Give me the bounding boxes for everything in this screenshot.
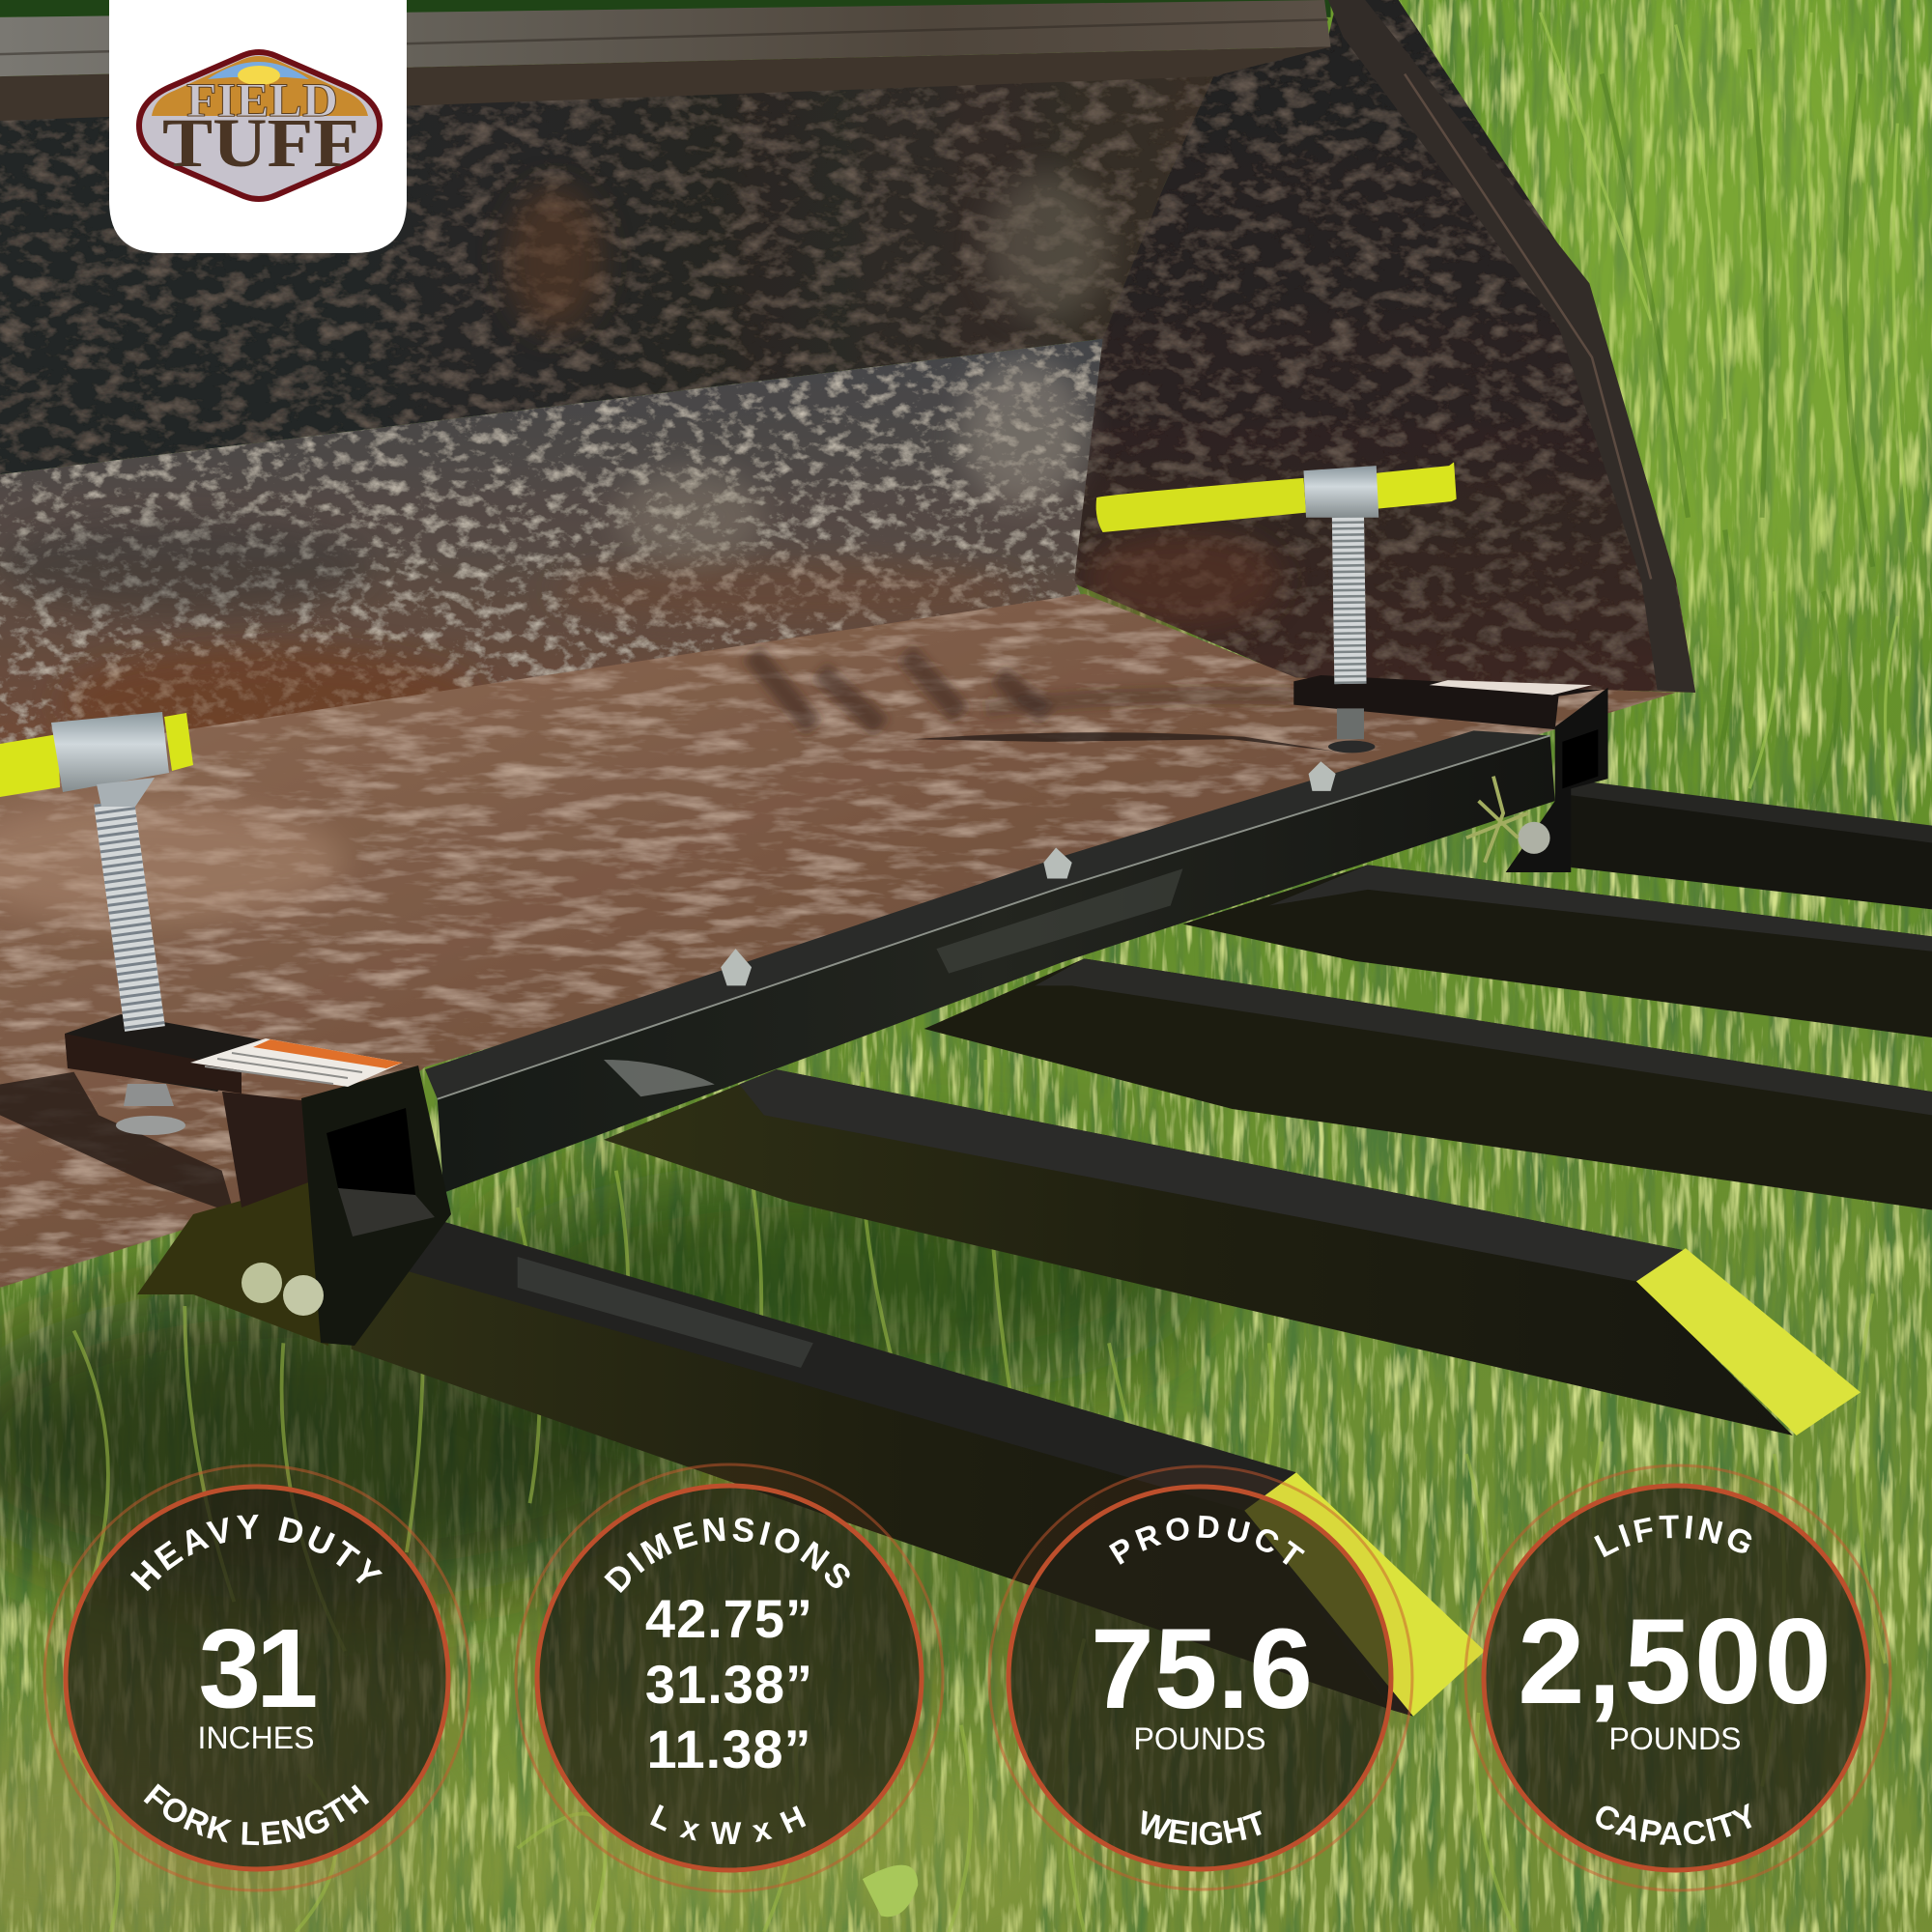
- logo emblem: TUFF: [162, 104, 359, 182]
- stat badge: dimensions: 42.75”: [645, 1588, 813, 1649]
- stat badge: lifting capacity: POUNDS: [1609, 1721, 1741, 1756]
- crossbar: [425, 730, 1555, 1193]
- logo emblem: [137, 48, 383, 199]
- bucket side plate: [1060, 0, 1695, 693]
- stat badge: dimensions: 11.38”: [646, 1719, 812, 1779]
- stat badge: product weight: WEIGHT: [1142, 1810, 1262, 1845]
- bucket floor: [0, 594, 1676, 1288]
- fork tine 3: [924, 958, 1932, 1210]
- fork tine 1 (front) with yellow tip: [332, 1189, 1485, 1717]
- bucket back wall, dark upper: [0, 49, 1306, 474]
- stat badge: dimensions: DIMENSIONS: [604, 1517, 850, 1593]
- bolts on crossbar: [721, 761, 1336, 985]
- stat badge: fork length: INCHES: [198, 1720, 314, 1755]
- stat badge: fork length: 31: [198, 1605, 316, 1731]
- stat badge: lifting capacity: 2,500: [1518, 1595, 1834, 1729]
- bucket back wall, lit rusty lower: [0, 339, 1103, 770]
- T-handle left: [0, 712, 193, 1135]
- stat badge: lifting capacity: CAPACITY: [1596, 1803, 1752, 1845]
- stat badge: product weight: [987, 1464, 1414, 1891]
- logo emblem: FIELD: [186, 72, 338, 127]
- right clamp assembly: [1293, 675, 1608, 872]
- left clamp bracket: [65, 1014, 451, 1346]
- stat badge: product weight: 75.6: [1091, 1605, 1313, 1733]
- stat badge: fork length: HEAVY DUTY: [129, 1515, 383, 1592]
- stat badge: lifting capacity: [1464, 1464, 1891, 1891]
- stat badge: fork length: [43, 1464, 471, 1891]
- stat badge: dimensions: L x W x H: [650, 1804, 806, 1844]
- fork tine 4: [1182, 865, 1932, 1037]
- stat badge: dimensions: 31.38”: [645, 1654, 813, 1715]
- fork tine 5 (rear): [1565, 779, 1932, 909]
- stat badge: fork length: FORK LENGTH: [143, 1783, 369, 1845]
- T-handle right: [1096, 462, 1457, 684]
- stat badge: dimensions: [514, 1463, 945, 1893]
- stat badge: lifting capacity: LIFTING: [1594, 1515, 1752, 1557]
- bucket top strip: [0, 0, 1331, 17]
- stat badge: product weight: POUNDS: [1134, 1721, 1265, 1756]
- stat badge: product weight: PRODUCT: [1109, 1515, 1305, 1565]
- bucket rim: [0, 0, 1331, 121]
- fork tine 2 with yellow tip: [604, 1069, 1861, 1435]
- logo panel: [109, 0, 407, 253]
- bolts on fork bracket: [242, 1263, 324, 1316]
